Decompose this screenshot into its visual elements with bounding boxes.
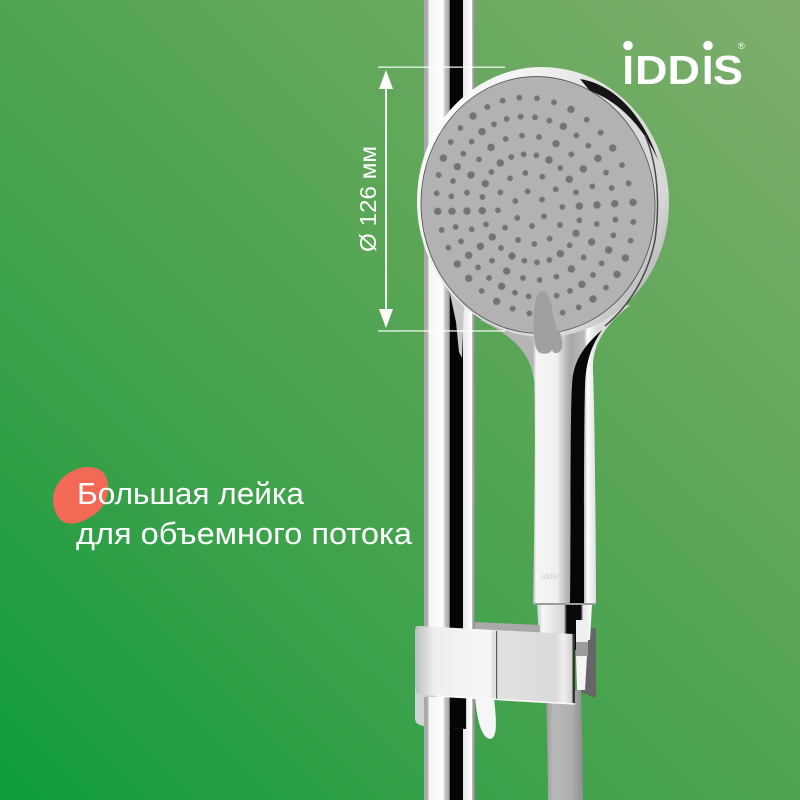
dimension lines: head diameter: [378, 66, 505, 332]
IDDIS logo: I: [702, 47, 713, 93]
behind-head rail hook: [449, 289, 464, 358]
shower handle: [480, 305, 630, 605]
IDDIS logo: DD: [635, 47, 700, 93]
handle logo mark: iddis: [542, 572, 558, 581]
headline text: для объемного потока: [76, 516, 413, 551]
hose: [546, 690, 583, 800]
headline text: Большая лейка: [77, 476, 305, 511]
handle neck connector: [537, 604, 592, 650]
rim inner dark edge: [605, 135, 658, 326]
chrome rim: [410, 61, 676, 343]
IDDIS logo: [622, 41, 745, 93]
handle black reflection: [570, 330, 602, 605]
registered mark: ®: [738, 41, 745, 51]
IDDIS logo: S: [713, 47, 743, 93]
grey hook tab: [534, 291, 562, 354]
shower head: [410, 61, 676, 354]
coral accent blob: [53, 467, 108, 524]
dark rim reflection: [580, 79, 658, 160]
dimension label: Ø 126 мм: [355, 146, 381, 252]
mounting bracket: [415, 622, 575, 729]
headline text: [76, 476, 413, 551]
lever under the bracket: [475, 696, 496, 739]
bracket back clip: [580, 628, 596, 698]
nozzle holes: [434, 95, 637, 316]
sliding rail: main chrome pipe: [424, 0, 475, 800]
IDDIS logo: I: [622, 47, 634, 93]
hose clip: [576, 620, 588, 690]
grey spray face: [412, 69, 664, 341]
